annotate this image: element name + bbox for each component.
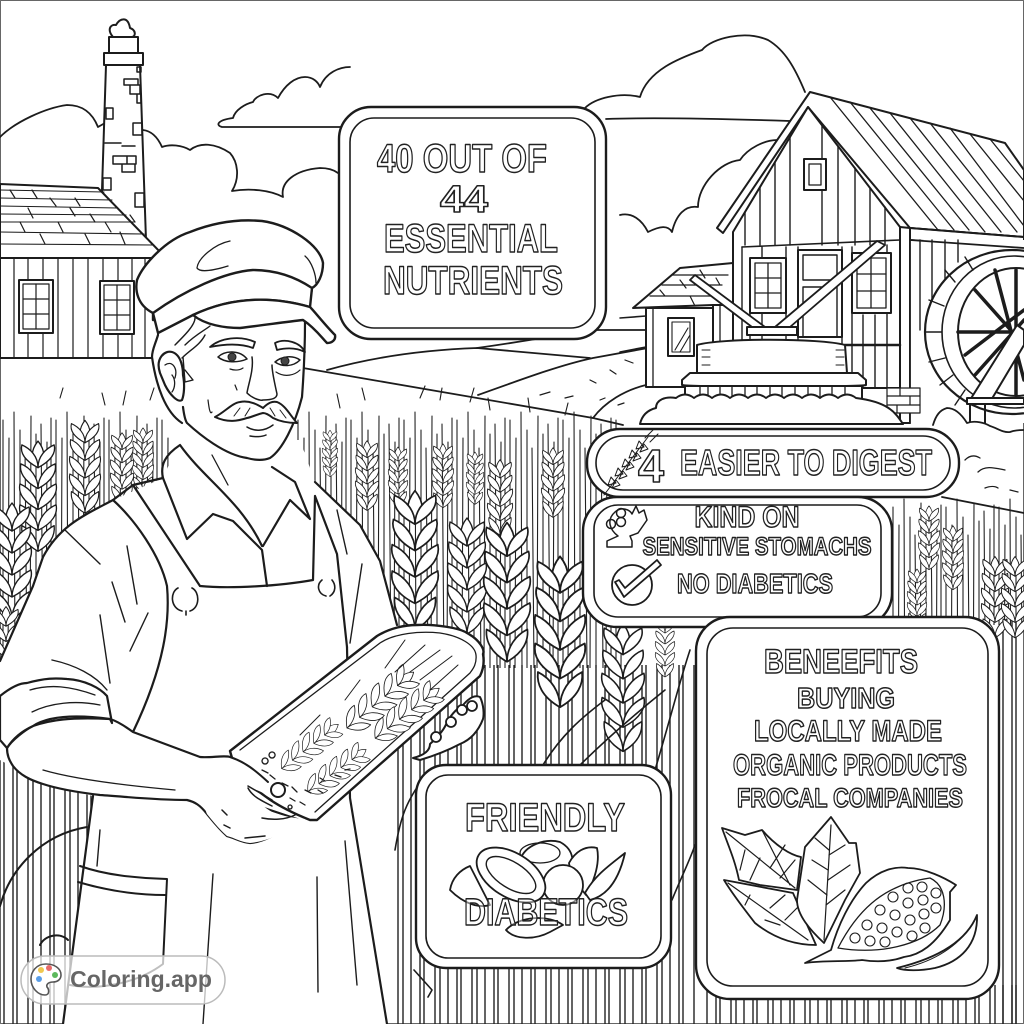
bush — [640, 394, 903, 424]
panel: 40 out of 44 essential nutrients: ESSENTIAL — [384, 217, 558, 261]
icon: palette — [31, 964, 61, 995]
panel: friendly diabetics: DIABETICS — [464, 892, 628, 934]
logo badge: Coloring.app: Coloring.app — [70, 966, 212, 992]
head — [152, 318, 305, 460]
panel: 40 out of 44 essential nutrients: 40 OUT OF — [377, 137, 547, 181]
panel: friendly diabetics: FRIENDLY — [465, 796, 625, 840]
straps and bib — [113, 485, 347, 732]
panel: benefits: BENEEFITS — [764, 643, 918, 681]
panel: kind on sensitive stomachs: NO DIABETICS — [677, 568, 833, 599]
shirt folds — [52, 510, 362, 1024]
water wheel — [925, 250, 1024, 513]
farmer — [0, 220, 397, 1024]
icon: dates and nuts — [450, 836, 625, 938]
left house — [0, 184, 163, 358]
panel: benefits: BUYING — [797, 683, 895, 715]
icon: stomach — [606, 506, 647, 547]
panel: easier to digest: EASIER TO DIGEST — [680, 442, 932, 483]
panel: 40 out of 44 essential nutrients — [339, 107, 606, 339]
barn and mill — [620, 92, 1024, 424]
panel: 40 out of 44 essential nutrients: NUTRIENTS — [383, 259, 563, 303]
panel: easier to digest: 4 — [638, 440, 664, 492]
panel: kind on sensitive stomachs: KIND ON — [694, 501, 800, 534]
field of wheat — [0, 386, 1024, 1024]
panel: benefits — [696, 617, 999, 999]
icon: check mark — [612, 560, 661, 605]
collar — [162, 445, 310, 586]
arm — [7, 718, 300, 843]
hat — [136, 220, 335, 343]
panel: easier to digest — [587, 429, 959, 497]
logo badge: Coloring.app — [21, 956, 225, 1004]
panel: kind on sensitive stomachs — [583, 497, 892, 627]
icon: leaves and seed pod — [722, 817, 977, 970]
shirt and apron body — [0, 440, 397, 1024]
hands — [205, 696, 484, 843]
scoop with wheat — [230, 625, 484, 820]
icon: wheat sprig — [604, 430, 658, 495]
shirt cuff — [0, 678, 112, 748]
lighthouse — [102, 19, 146, 240]
panel: benefits: FROCAL COMPANIES — [737, 783, 963, 813]
panel: friendly diabetics — [416, 765, 671, 968]
pocket — [70, 866, 167, 987]
millstone beams — [690, 241, 885, 327]
panel: kind on sensitive stomachs: SENSITIVE STOMACHS — [642, 533, 872, 561]
rolling hills — [0, 330, 648, 425]
panel: 40 out of 44 essential nutrients: 44 — [440, 179, 488, 221]
clouds — [0, 35, 805, 232]
panel: benefits: LOCALLY MADE — [754, 715, 942, 748]
apron buttons — [172, 580, 335, 615]
